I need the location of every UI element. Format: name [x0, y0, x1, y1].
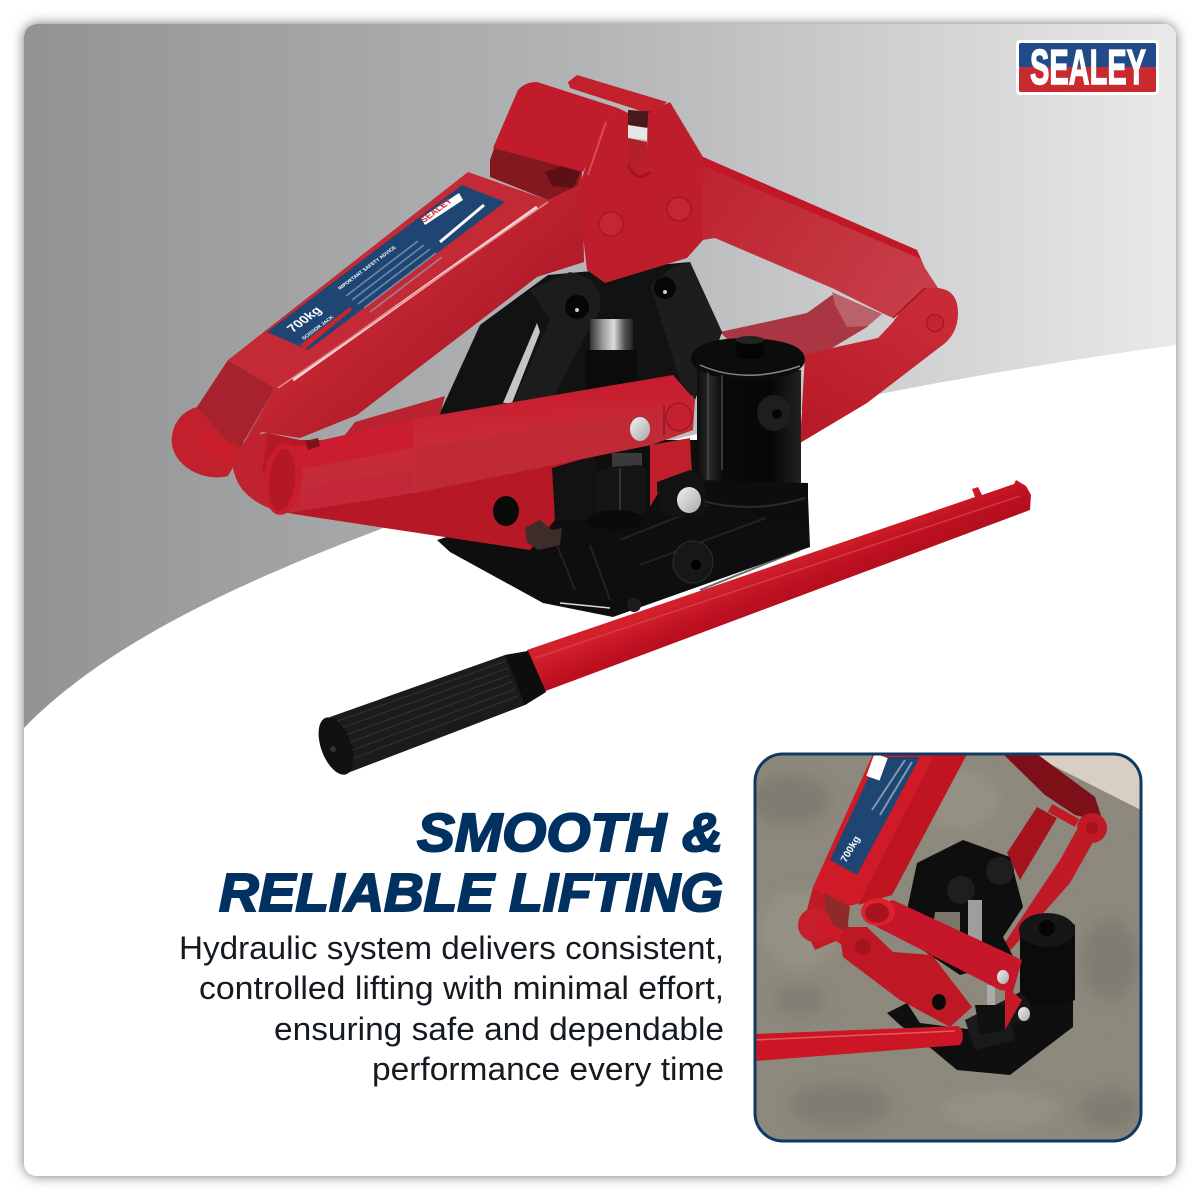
body text	[179, 930, 724, 1087]
heading: RELIABLE LIFTING	[219, 863, 723, 923]
inset photo	[750, 753, 1141, 1141]
product: scissor jack	[172, 75, 1031, 779]
right upper arm and pivot plate	[703, 157, 958, 443]
inset main arm: 700kg	[839, 834, 863, 864]
body text: ensuring safe and dependable	[274, 1011, 724, 1047]
inset jack cylinder	[1020, 923, 1075, 1001]
inset pump rod	[987, 985, 995, 1007]
main arm	[172, 140, 584, 477]
inset main arm	[798, 753, 967, 950]
handle bar	[527, 480, 1031, 692]
lower front plate	[233, 433, 692, 550]
inset jack rear arm	[1000, 754, 1107, 953]
left rear arm	[335, 396, 445, 448]
safety label: 700kg	[283, 304, 325, 335]
inset lever plate	[840, 927, 972, 1027]
safety label: SCISSOR JACK	[301, 315, 336, 341]
body text: Hydraulic system delivers consistent,	[179, 930, 724, 966]
safety label: IMPORTANT SAFETY ADVICE	[337, 245, 399, 291]
safety label	[267, 185, 505, 350]
logo: Sealey	[1016, 40, 1159, 95]
handle grip	[312, 651, 546, 779]
black A-frame	[440, 262, 722, 420]
concrete floor	[750, 754, 1141, 1141]
inset jack A-frame	[907, 840, 1023, 975]
body text: performance every time	[372, 1051, 724, 1087]
body text: controlled lifting with minimal effort,	[199, 970, 724, 1006]
rear arm	[720, 292, 882, 372]
base casting	[437, 440, 810, 617]
pump hex nut	[587, 453, 705, 530]
heading	[219, 803, 723, 923]
pump cylinder	[691, 336, 808, 530]
heading: SMOOTH &	[417, 803, 723, 863]
inset bar	[755, 1026, 963, 1061]
safety label: SEALEY	[418, 197, 454, 224]
lever tube	[260, 375, 695, 517]
inset jack base	[887, 1000, 1073, 1075]
wall	[1039, 756, 1140, 810]
inset tube	[863, 900, 1022, 992]
head bracket	[493, 75, 703, 283]
